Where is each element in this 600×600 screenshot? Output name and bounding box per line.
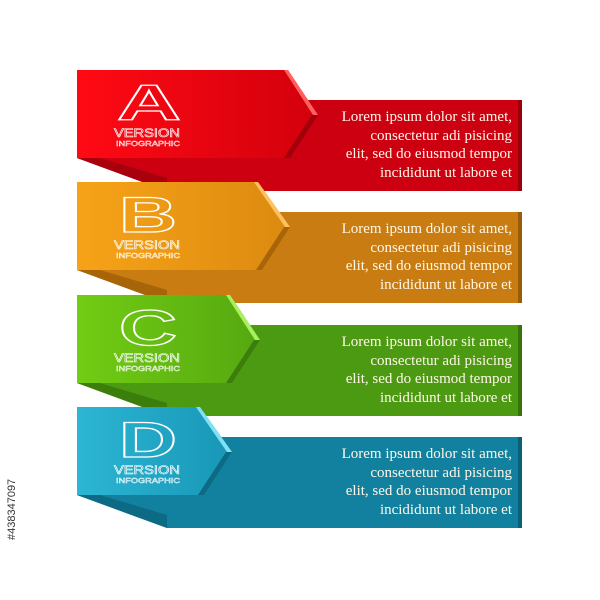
text B: elit, sed do eiusmod tempor — [346, 258, 512, 274]
back panel A — [77, 100, 522, 191]
back panel C — [77, 325, 522, 416]
letter C: C — [119, 300, 177, 356]
label C: VERSION — [114, 351, 180, 365]
band A — [77, 70, 522, 191]
text B — [342, 221, 513, 293]
text C: consectetur adi pisicing — [370, 353, 512, 369]
letter A: A — [117, 75, 181, 131]
text C: elit, sed do eiusmod tempor — [346, 371, 512, 387]
text A: Lorem ipsum dolor sit amet, — [342, 109, 512, 125]
back panel D — [77, 437, 522, 528]
label A: VERSION — [114, 126, 180, 140]
text C — [342, 334, 513, 406]
text C: incididunt ut labore et — [380, 390, 513, 406]
text D — [342, 446, 513, 518]
text D: consectetur adi pisicing — [370, 465, 512, 481]
front arrow A: INFOGRAPHIC — [116, 141, 180, 148]
text A: consectetur adi pisicing — [370, 128, 512, 144]
front arrow B: INFOGRAPHIC — [116, 253, 180, 260]
band D — [77, 407, 522, 528]
band B — [77, 182, 522, 303]
label B: VERSION — [114, 238, 180, 252]
text C: Lorem ipsum dolor sit amet, — [342, 334, 512, 350]
text A: elit, sed do eiusmod tempor — [346, 146, 512, 162]
label D: VERSION — [114, 463, 180, 477]
watermark id: #438347097 — [6, 479, 18, 540]
text B: incididunt ut labore et — [380, 277, 513, 293]
front arrow D: INFOGRAPHIC — [116, 478, 180, 485]
front arrow D — [77, 407, 232, 495]
front arrow C: INFOGRAPHIC — [116, 366, 180, 373]
back panel B — [77, 212, 522, 303]
letter D: D — [119, 412, 177, 468]
text D: elit, sed do eiusmod tempor — [346, 483, 512, 499]
front arrow A — [77, 70, 318, 158]
text B: Lorem ipsum dolor sit amet, — [342, 221, 512, 237]
text D: Lorem ipsum dolor sit amet, — [342, 446, 512, 462]
text D: incididunt ut labore et — [380, 502, 513, 518]
band C — [77, 295, 522, 416]
front arrow C — [77, 295, 260, 383]
text A: incididunt ut labore et — [380, 165, 513, 181]
text A — [342, 109, 513, 181]
text B: consectetur adi pisicing — [370, 240, 512, 256]
front arrow B — [77, 182, 290, 270]
letter B: B — [119, 187, 177, 243]
